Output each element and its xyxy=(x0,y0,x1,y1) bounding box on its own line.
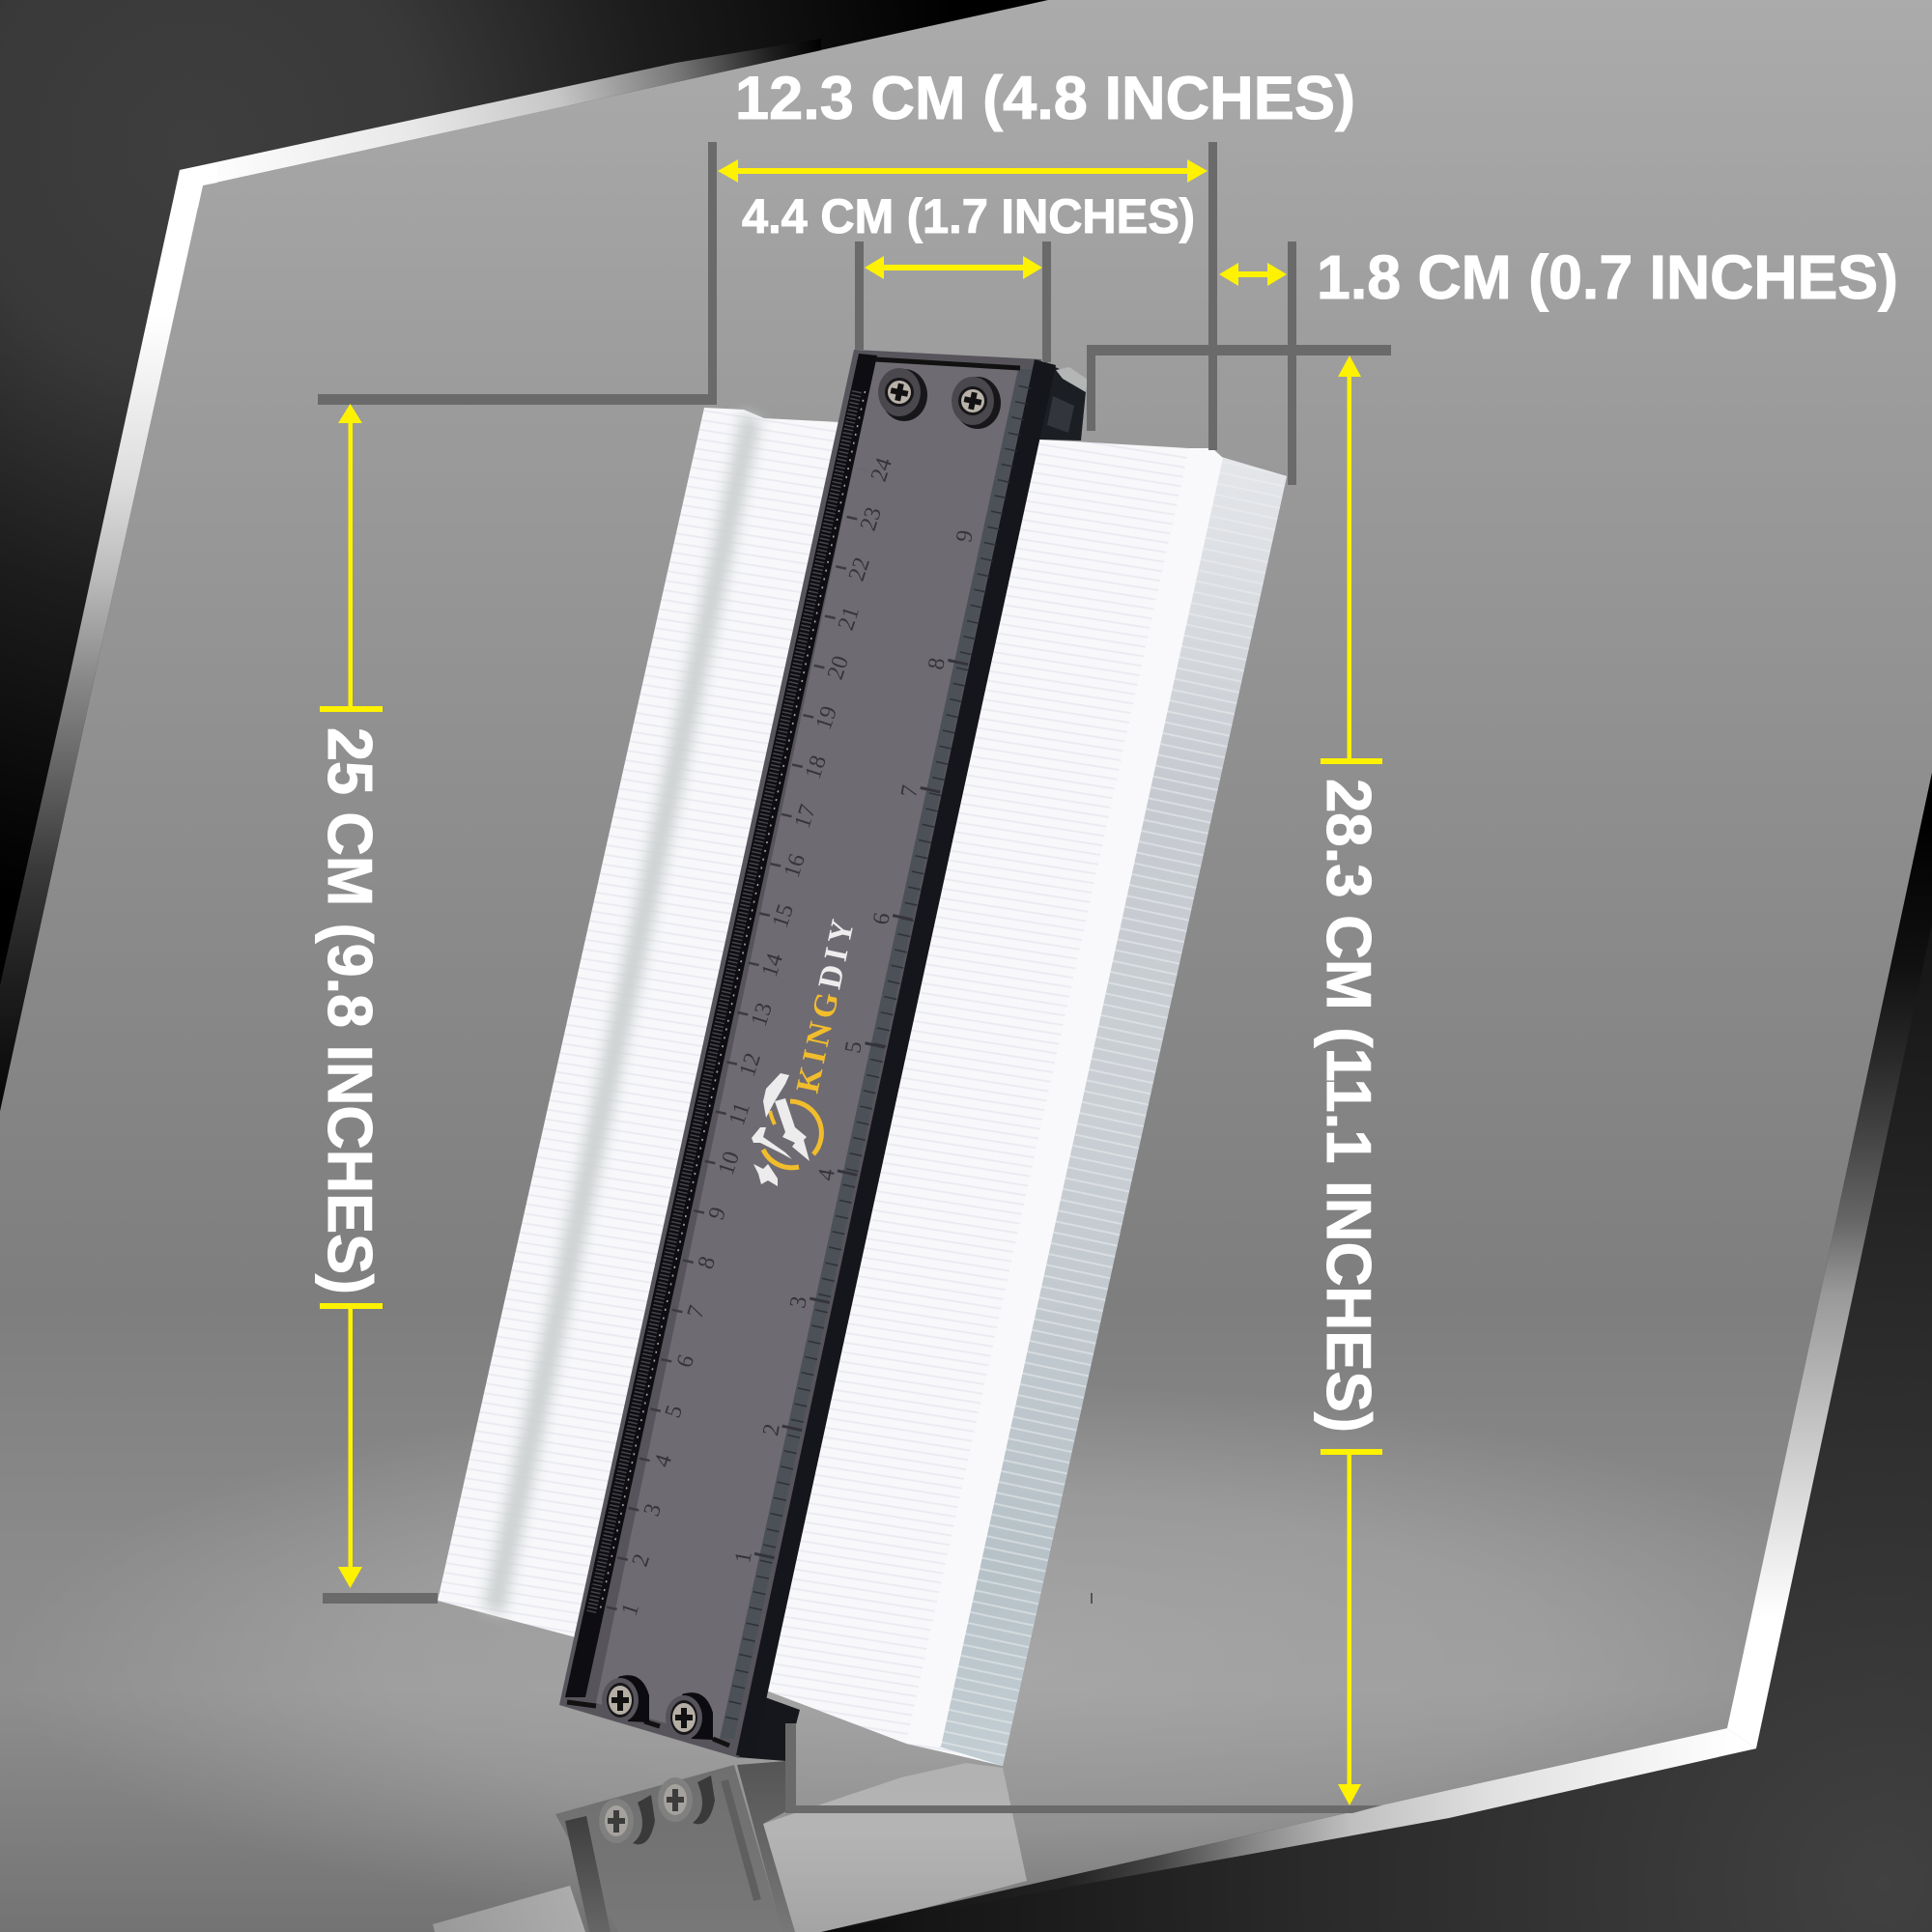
inch scale numbers: 2 xyxy=(758,1422,785,1437)
screw: bottom right xyxy=(666,1692,713,1740)
centimetre scale numbers: 20 xyxy=(823,653,854,683)
KINGDIY logo wordmark: KINGDIY xyxy=(790,917,862,1096)
label: 1.8 cm: 1.8 CM (0.7 INCHES) xyxy=(1317,242,1898,312)
centimetre scale numbers: 4 xyxy=(650,1452,677,1470)
centimetre scale numbers: 6 xyxy=(672,1352,699,1371)
inch scale numbers: 3 xyxy=(785,1294,812,1310)
centimetre scale numbers: 18 xyxy=(801,753,832,782)
product reflection on floor xyxy=(433,1761,1027,1932)
inch ticks xyxy=(764,536,985,1557)
inch scale numbers: 8 xyxy=(923,656,951,671)
centimetre scale numbers: 11 xyxy=(724,1099,755,1128)
end cap bottom xyxy=(737,1697,800,1761)
label: 28.3 cm: 28.3 CM (11.1 INCHES) xyxy=(1314,779,1384,1433)
screw: top right xyxy=(952,377,1001,429)
contour gauge product xyxy=(438,350,1287,1766)
centimetre scale numbers: 12 xyxy=(735,1050,766,1080)
centimetre scale numbers: 14 xyxy=(757,951,788,980)
dimension guide lines xyxy=(318,142,1391,1813)
centimetre scale numbers: 7 xyxy=(683,1303,710,1321)
label: 12.3 cm: 12.3 CM (4.8 INCHES) xyxy=(735,65,1355,132)
arrow: 12.3 cm width xyxy=(718,159,1208,183)
arrow: 1.8 cm width xyxy=(1219,263,1287,286)
centimetre scale numbers: 21 xyxy=(834,604,865,634)
centimetre scale numbers: 8 xyxy=(694,1254,721,1272)
centimetre scale numbers: 9 xyxy=(704,1205,731,1223)
inch scale numbers: 7 xyxy=(896,783,923,799)
centimetre scale numbers: 10 xyxy=(714,1149,745,1179)
inch scale numbers: 9 xyxy=(952,528,979,544)
centimetre scale numbers: 16 xyxy=(780,851,810,881)
centimetre scale numbers: 19 xyxy=(811,703,842,733)
inch scale numbers xyxy=(730,528,979,1565)
arrow: 4.4 cm width xyxy=(865,256,1042,279)
centimetre ticks xyxy=(611,469,863,1609)
centimetre scale numbers: 2 xyxy=(628,1551,655,1570)
centimetre scale numbers: 17 xyxy=(790,802,821,832)
small tick mark xyxy=(1091,1593,1093,1604)
centimetre scale numbers: 13 xyxy=(747,1000,778,1030)
screw: top left xyxy=(878,368,927,421)
end cap top xyxy=(1039,365,1088,440)
inch scale numbers: 4 xyxy=(813,1167,840,1182)
centimetre scale numbers: 5 xyxy=(661,1403,688,1421)
centimetre scale numbers: 24 xyxy=(867,455,897,485)
ruler bar xyxy=(559,350,1056,1758)
inch scale numbers: 5 xyxy=(840,1039,867,1055)
screw: bottom left xyxy=(602,1675,649,1722)
centimetre scale numbers: 1 xyxy=(617,1601,644,1619)
centimetre scale numbers xyxy=(617,455,897,1619)
KINGDIY logo icon xyxy=(752,1073,821,1186)
inch scale numbers: 1 xyxy=(730,1549,757,1565)
inch scale numbers: 6 xyxy=(868,911,895,926)
label: 25 cm: 25 CM (9.8 INCHES) xyxy=(315,727,385,1294)
centimetre scale numbers: 22 xyxy=(844,554,875,584)
arrow: 28.3 cm height xyxy=(1321,355,1382,1805)
centimetre scale numbers: 3 xyxy=(639,1501,667,1520)
arrow: 25 cm height xyxy=(320,404,383,1588)
white comb body xyxy=(438,408,1287,1766)
centimetre scale numbers: 23 xyxy=(856,504,887,534)
centimetre scale numbers: 15 xyxy=(768,901,799,931)
label: 4.4 cm: 4.4 CM (1.7 INCHES) xyxy=(742,189,1195,243)
